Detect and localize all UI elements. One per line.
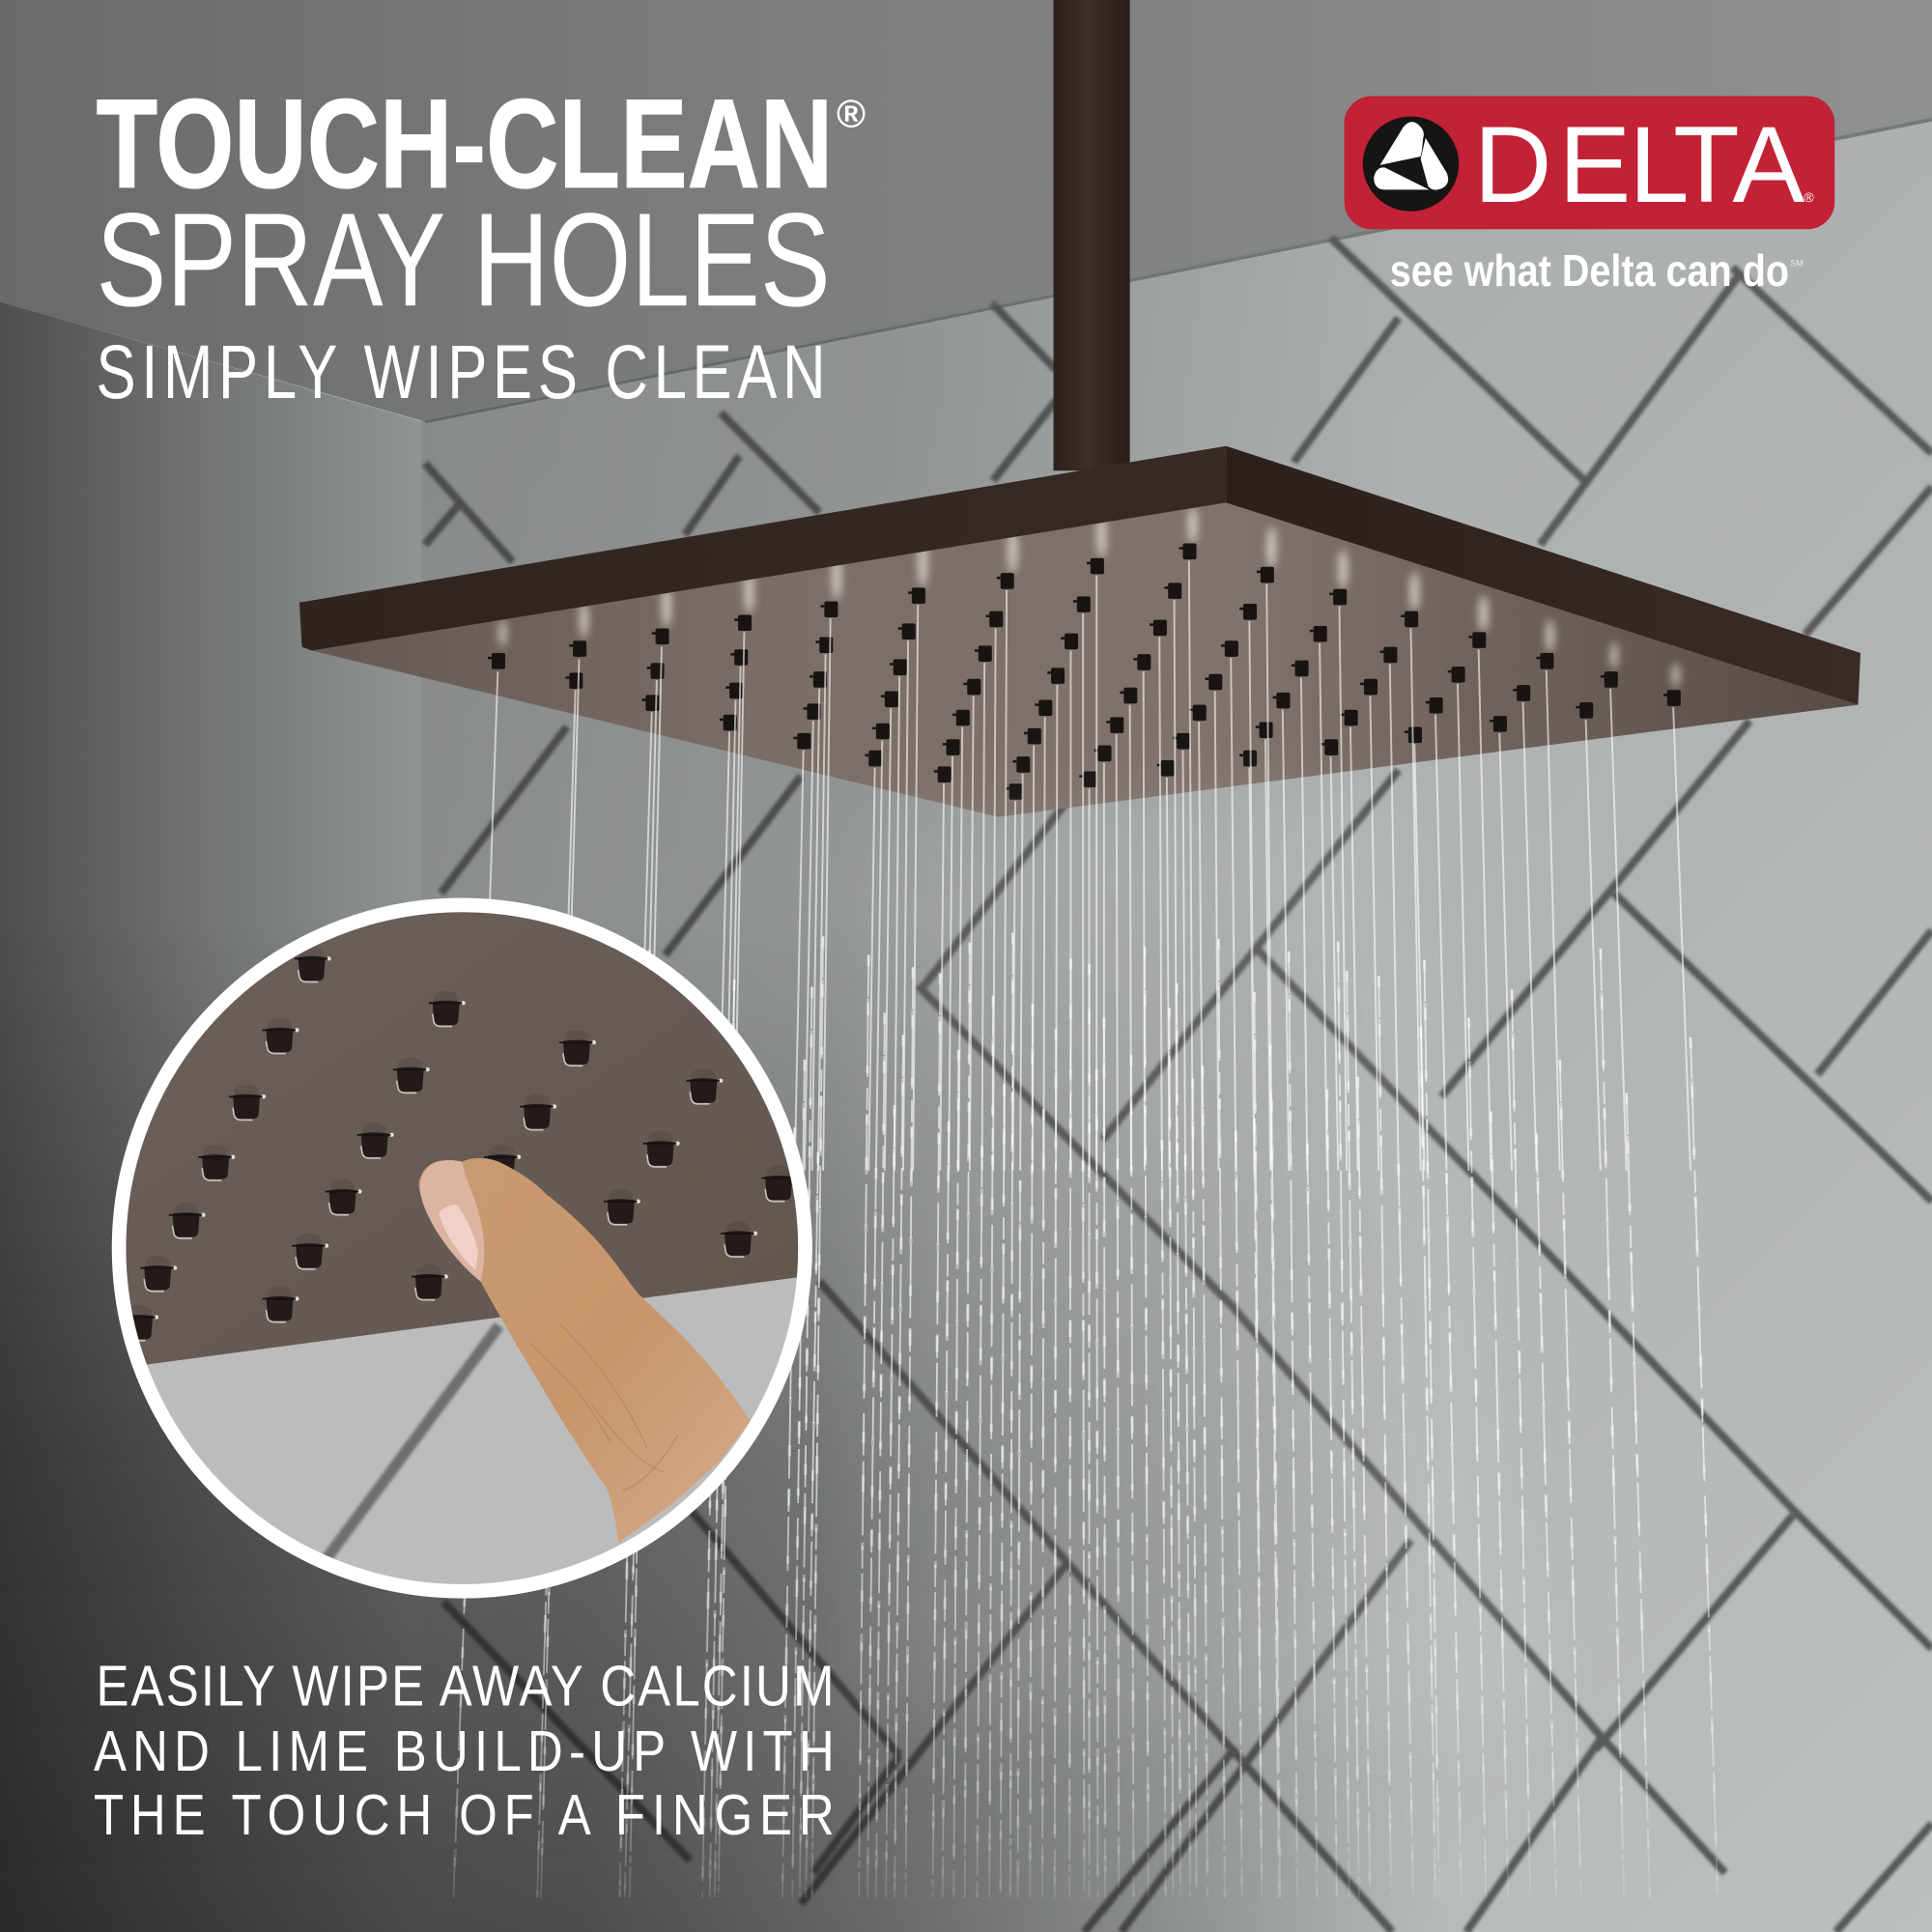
rain shower head — [299, 446, 1861, 817]
wordmark registered mark: ® — [1804, 189, 1814, 205]
bottom caption — [94, 1654, 835, 1847]
registered mark: ® — [837, 91, 866, 135]
red badge — [1345, 96, 1834, 229]
Delta logo — [1345, 96, 1834, 296]
finger — [419, 1158, 751, 1543]
front edge band right — [1226, 446, 1861, 705]
water spray streams — [453, 560, 1718, 1897]
inset nozzles — [122, 947, 798, 1341]
caption line 2: AND LIME BUILD-UP WITH — [94, 1719, 835, 1783]
spray nozzles — [488, 543, 1681, 800]
title: Spray Holes: SPRAY HOLES — [96, 185, 831, 334]
grout line in inset — [327, 1325, 499, 1559]
inset circle: finger wiping nozzle — [111, 887, 813, 1591]
light reflections above nozzles — [499, 506, 1680, 688]
inset white ring — [119, 905, 806, 1591]
shower head spray face — [312, 502, 1858, 817]
wordmark: DELTA — [1474, 103, 1804, 225]
front edge band left — [299, 446, 1226, 650]
icon: Delta triangle mark — [1363, 117, 1459, 212]
service mark: SM — [1790, 259, 1804, 269]
subtitle: SIMPLY WIPES CLEAN — [96, 330, 826, 415]
inset shower plate — [111, 887, 813, 1368]
title block — [96, 72, 866, 415]
title: Touch-Clean: TOUCH-CLEAN — [96, 72, 833, 214]
caption line 3: THE TOUCH OF A FINGER — [94, 1783, 835, 1847]
shower arm pipe — [1054, 0, 1130, 470]
caption line 1: EASILY WIPE AWAY CALCIUM — [96, 1654, 835, 1718]
inset background — [126, 912, 799, 1584]
tagline: see what Delta can do — [1390, 245, 1789, 296]
